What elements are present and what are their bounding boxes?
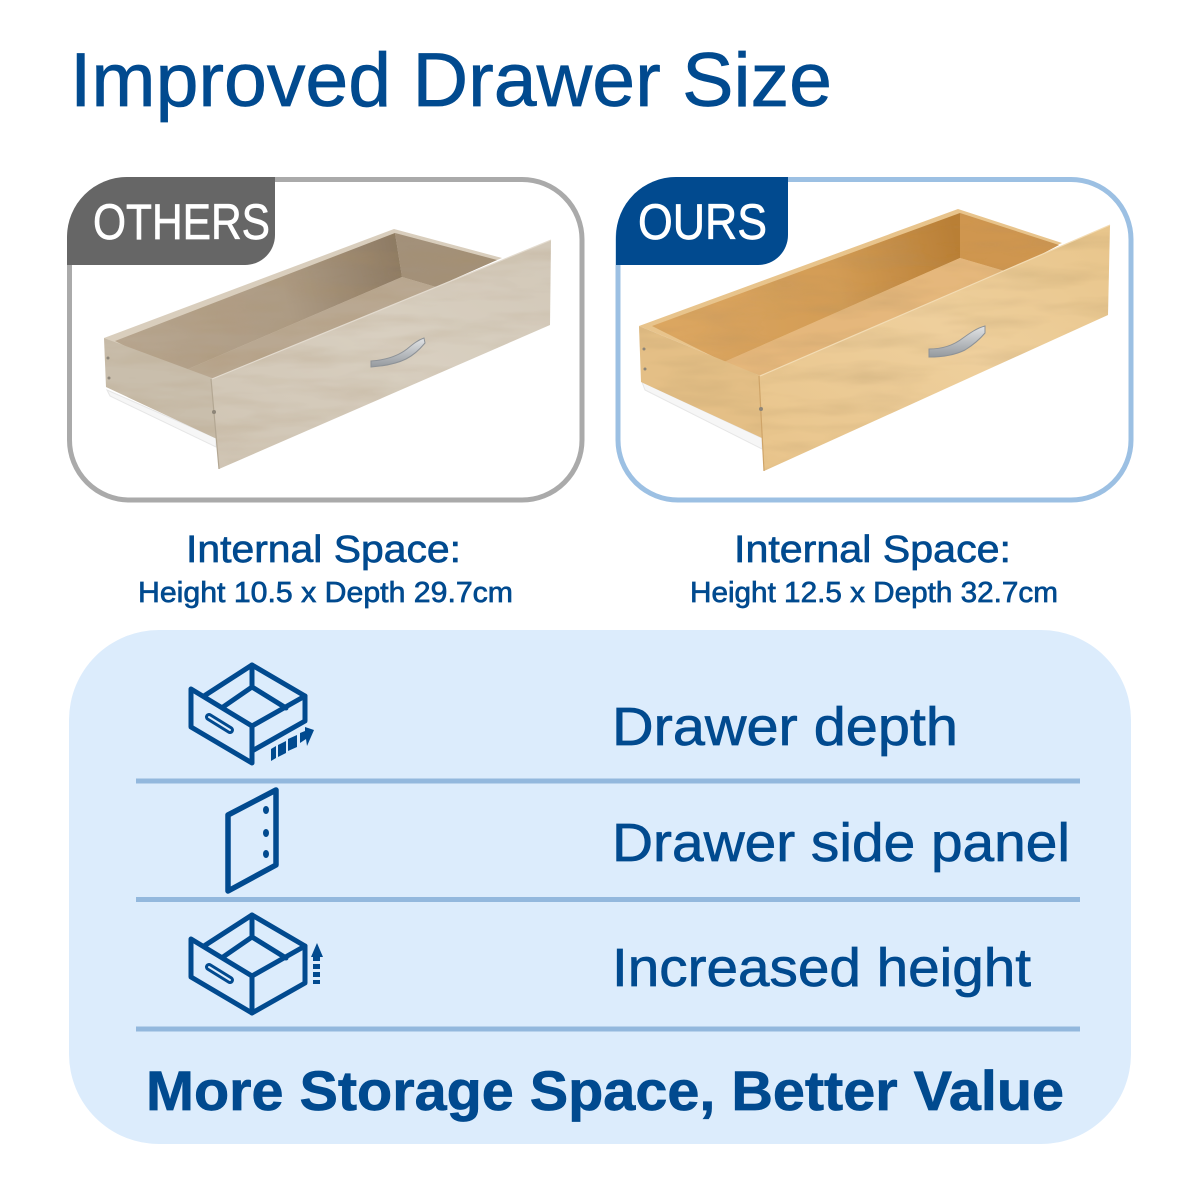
caption: ours <box>690 529 1058 609</box>
panel: ours <box>616 177 1131 500</box>
image: others drawer <box>104 229 551 469</box>
caption: others: Internal Space: <box>186 529 461 571</box>
title: Improved Drawer Size <box>70 38 832 123</box>
tagline: More Storage Space, Better Value <box>146 1059 1064 1122</box>
badge: others: OTHERS <box>93 194 270 250</box>
image: ours drawer <box>639 209 1110 471</box>
badge: ours <box>616 177 788 265</box>
row label: drawer depth: Drawer depth <box>612 697 958 757</box>
icon: side panel <box>228 790 276 891</box>
badge: others <box>67 177 275 265</box>
badge: ours: OURS <box>638 194 767 250</box>
panel: features <box>69 630 1131 1144</box>
icon: drawer depth <box>191 665 314 763</box>
caption: others <box>138 529 513 609</box>
caption: others: Height 10.5 x Depth 29.7cm <box>138 577 513 609</box>
row label: increased height: Increased height <box>612 938 1031 998</box>
caption: ours: Internal Space: <box>734 529 1011 571</box>
panel: others <box>67 177 582 500</box>
row label: side panel: Drawer side panel <box>612 813 1070 873</box>
icon: increased height <box>191 915 323 1013</box>
caption: ours: Height 12.5 x Depth 32.7cm <box>690 577 1058 609</box>
